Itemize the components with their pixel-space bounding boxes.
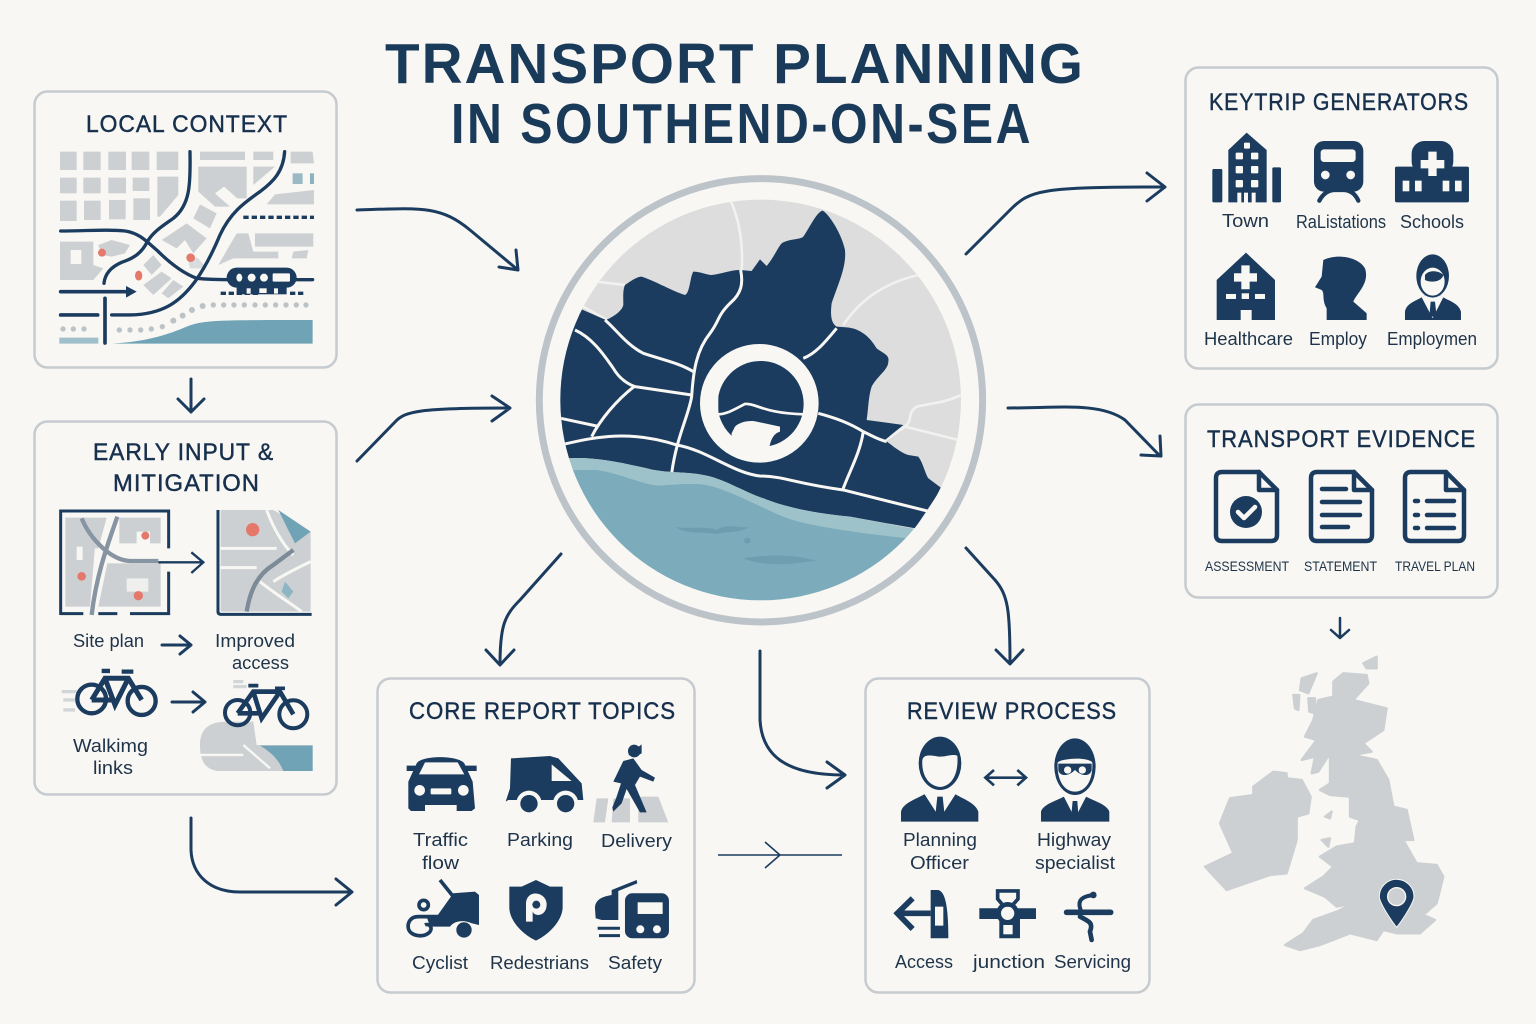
labels: key trip generators	[1204, 211, 1477, 349]
icon: pedestrian crossing	[593, 744, 668, 822]
arrow: two-way liaison	[985, 770, 1026, 785]
arrow: early input to core report topics	[191, 818, 352, 905]
town centre inset	[700, 344, 819, 463]
icon: shield parking	[509, 880, 563, 941]
labels: review process	[895, 830, 1131, 972]
labels: review process: specialist	[1035, 853, 1115, 873]
labels: key trip generators: Employmen	[1387, 329, 1477, 349]
icon: train	[227, 268, 297, 294]
icon: employment person	[1405, 254, 1461, 320]
arrow: local context to central map	[357, 209, 518, 270]
label: walking links: Walkimg	[73, 736, 148, 756]
icon: truck	[595, 880, 669, 938]
icon: healthcare	[1217, 253, 1275, 320]
labels: core report topics: Cyclist	[412, 953, 468, 973]
labels: review process: Highway	[1037, 830, 1111, 850]
map: improved access	[218, 510, 312, 614]
icon: location pin	[1379, 879, 1414, 927]
labels: transport evidence	[1205, 558, 1475, 574]
icon: rail station	[1314, 141, 1363, 201]
labels: core report topics: Parking	[507, 830, 573, 850]
arrow: central map to review lower	[760, 651, 845, 788]
labels: key trip generators: Town	[1222, 211, 1269, 231]
icon: assessment document	[1216, 472, 1277, 541]
arrow: central map to review process	[966, 548, 1023, 664]
heading: early input and mitigation: EARLY INPUT &	[93, 439, 274, 466]
central map	[539, 179, 983, 622]
icon: planning officer	[901, 737, 978, 822]
icon: travel plan document	[1405, 472, 1464, 541]
labels: key trip generators: Healthcare	[1204, 329, 1293, 349]
label: improved access: access	[232, 653, 289, 673]
panel: core report topics	[378, 678, 694, 992]
labels: review process: Officer	[910, 853, 969, 873]
arrow: core topics to review process	[718, 842, 842, 868]
labels: core report topics: Traffic	[413, 830, 468, 850]
heading: early input and mitigation: MITIGATION	[113, 470, 260, 497]
icon: van	[506, 756, 583, 816]
labels: review process: Servicing	[1054, 952, 1131, 972]
labels: review process: junction	[972, 952, 1045, 972]
panel: review process	[866, 678, 1150, 992]
label: walking links: links	[93, 758, 133, 778]
land: borough silhouette	[550, 211, 942, 528]
icon: statement document	[1311, 472, 1372, 541]
labels: core report topics: Safety	[608, 953, 662, 973]
labels: core report topics: Delivery	[601, 831, 672, 851]
heading: review process: REVIEW PROCESS	[907, 698, 1117, 725]
icon: schools	[1395, 141, 1469, 202]
map: local street network	[59, 152, 314, 344]
heading: transport evidence: TRANSPORT EVIDENCE	[1207, 426, 1476, 453]
panel: early input and mitigation	[34, 422, 336, 794]
labels: transport evidence: TRAVEL PLAN	[1395, 558, 1475, 574]
icon: town	[1212, 133, 1281, 203]
labels: transport evidence: STATEMENT	[1304, 558, 1377, 574]
heading: core report topics: CORE REPORT TOPICS	[409, 698, 676, 725]
arrow: central map to core report topics	[486, 554, 561, 665]
panel: local context	[34, 92, 336, 368]
labels: key trip generators: RaListations	[1296, 212, 1386, 232]
label: walking links	[73, 736, 148, 778]
icon: bicycle	[62, 671, 156, 715]
icon: junction	[979, 891, 1036, 938]
map: site plan	[61, 511, 203, 615]
arrow: site plan to improved access	[162, 636, 191, 654]
heading: early input and mitigation	[93, 439, 274, 497]
labels: core report topics: Redestrians	[490, 953, 589, 973]
heading: key trip generators: KEYTRIP GENERATORS	[1209, 89, 1469, 116]
labels: key trip generators: Schools	[1400, 212, 1464, 232]
label: improved access: Improved	[215, 631, 295, 651]
labels: review process: Planning	[903, 830, 977, 850]
labels: key trip generators: Employ	[1309, 329, 1367, 349]
icon: employment head	[1315, 257, 1367, 320]
icon: car	[407, 757, 477, 811]
label: site plan: Site plan	[73, 631, 144, 651]
arrow: transport evidence to UK map	[1331, 618, 1349, 638]
label: improved access	[215, 631, 295, 673]
icon: cyclist	[408, 880, 479, 938]
arrow: central map to transport evidence	[1008, 407, 1161, 456]
title	[385, 32, 1085, 156]
arrow: early input to central map	[357, 396, 510, 461]
icon: access	[897, 890, 948, 938]
labels: core report topics	[412, 830, 672, 973]
map: United Kingdom and Ireland	[1205, 657, 1443, 950]
heading: local context: LOCAL CONTEXT	[86, 111, 288, 138]
arrow: local context to early input	[178, 379, 204, 412]
road network	[561, 270, 930, 512]
title: IN SOUTHEND-ON-SEA	[451, 92, 1033, 156]
arrow: central map to key trip generators	[966, 173, 1165, 254]
labels: core report topics: flow	[422, 853, 460, 873]
arrow: bicycle to improved route	[172, 692, 205, 712]
icon: improved cycle route	[200, 682, 313, 771]
title: TRANSPORT PLANNING	[385, 32, 1085, 96]
labels: transport evidence: ASSESSMENT	[1205, 558, 1289, 574]
icon: servicing	[1067, 892, 1111, 940]
panel: transport evidence	[1186, 404, 1498, 598]
labels: review process: Access	[895, 952, 953, 972]
icon: highway specialist	[1041, 738, 1109, 822]
water	[568, 458, 920, 542]
panel: key trip generators	[1186, 68, 1498, 368]
